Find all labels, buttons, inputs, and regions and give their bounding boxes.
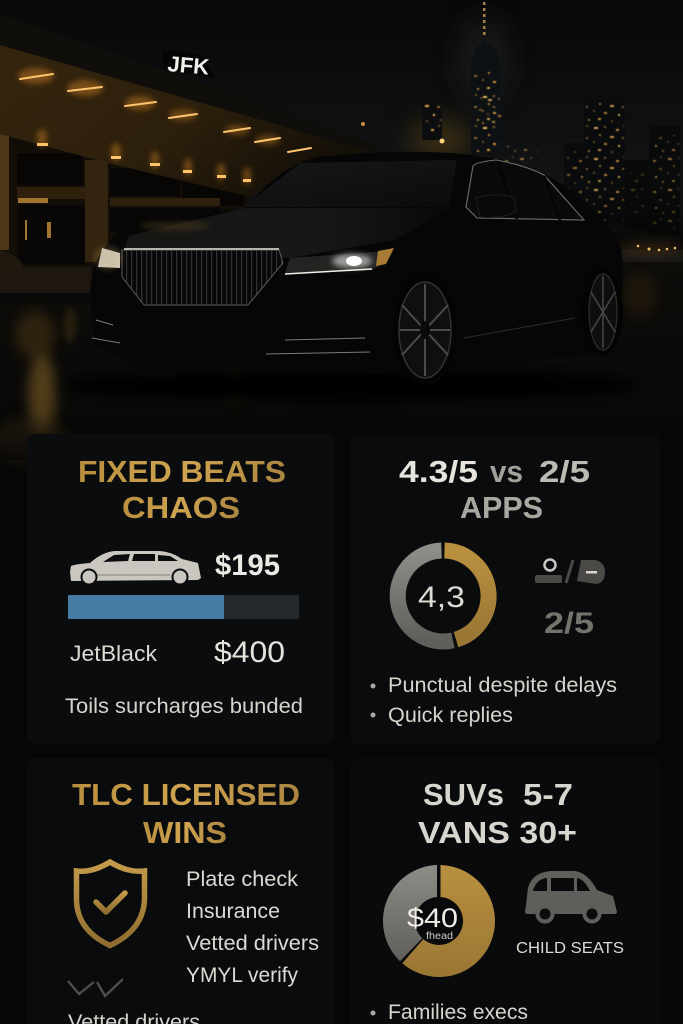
value: 2/5: 2/5	[544, 607, 594, 640]
donut chart: 4.3 rating: 4,3	[418, 581, 465, 614]
price: $400: $400	[214, 636, 285, 669]
heading: ratings	[399, 454, 590, 525]
icon: double gray checks	[68, 979, 123, 996]
front wheel	[398, 281, 452, 379]
heading: fixed beats chaos: CHAOS	[122, 490, 240, 525]
checklist: verification items: Insurance	[186, 900, 280, 923]
black limousine	[60, 152, 640, 401]
label: child seats: CHILD SEATS	[516, 940, 624, 957]
checklist: verification items: Plate check	[186, 868, 299, 891]
road and wet reflections	[0, 262, 683, 470]
bumper trim	[92, 318, 575, 354]
checklist: verification items: YMYL verify	[186, 964, 298, 987]
heading: ratings: 2/5	[539, 454, 590, 489]
icon: gold shield with check	[76, 862, 144, 946]
heading: SUVs and vans: VANS 30+	[418, 815, 577, 850]
windshield	[244, 160, 457, 207]
label: JetBlack: JetBlack	[70, 641, 158, 666]
headlights	[285, 252, 381, 273]
heading: ratings: vs	[490, 454, 523, 489]
grille	[122, 250, 283, 305]
donut chart: 4.3 rating	[398, 550, 489, 641]
icon: gray van	[525, 871, 617, 922]
side windows	[466, 160, 584, 220]
city skyline	[361, 2, 683, 257]
bullet: families execs: Families execs	[388, 1001, 528, 1024]
checklist: verification items: Vetted drivers	[186, 932, 319, 955]
donut chart: $40 per head: $40	[407, 903, 458, 933]
heading: TLC licensed wins	[72, 777, 300, 850]
JFK sign: JFK	[167, 51, 210, 80]
heading: fixed beats chaos	[78, 454, 286, 525]
hood	[125, 208, 403, 258]
bullet list: reliability: Quick replies	[388, 704, 513, 727]
icon: apps rating symbol	[535, 560, 605, 584]
heading: TLC licensed wins: TLC LICENSED	[72, 777, 300, 812]
rear wheel	[588, 274, 623, 350]
price: $195: $195	[215, 549, 280, 582]
note: surcharges: Toils surcharges bunded	[65, 695, 303, 718]
terminal building and canopy	[0, 14, 388, 276]
panel: TLC licensed wins	[27, 758, 335, 1024]
night sky	[244, 98, 683, 262]
bullet list: reliability	[370, 674, 617, 727]
icon: white limousine	[70, 551, 201, 584]
bullet list: reliability: Punctual despite delays	[388, 674, 617, 697]
panel: vehicle capacity	[350, 758, 660, 1024]
donut chart: $40 per head: fhead	[426, 931, 453, 942]
heading: SUVs and vans	[418, 777, 577, 850]
heading: TLC licensed wins: WINS	[143, 815, 227, 850]
heading: ratings: APPS	[460, 490, 543, 525]
panel: fixed beats chaos	[27, 434, 335, 744]
mirror	[476, 195, 516, 217]
checklist: verification items	[186, 868, 319, 987]
heading: SUVs and vans: SUVs	[423, 777, 504, 812]
heading: fixed beats chaos: FIXED BEATS	[78, 454, 286, 489]
heading: SUVs and vans: 5-7	[523, 777, 573, 812]
panel: ratings comparison	[350, 434, 660, 744]
donut chart: $40 per head	[383, 865, 495, 977]
price comparison bar	[68, 595, 299, 619]
heading: ratings: 4.3/5	[399, 454, 478, 489]
hero photo: limousine at JFK at night	[0, 0, 683, 470]
